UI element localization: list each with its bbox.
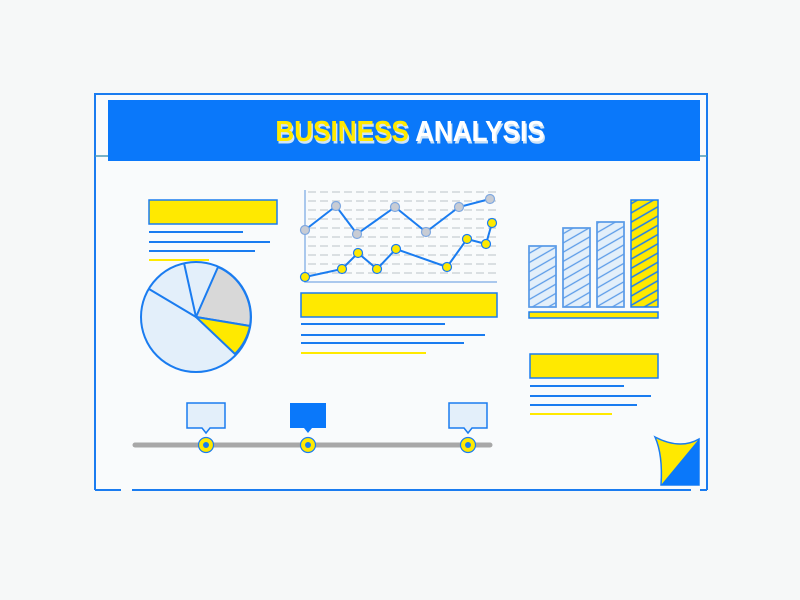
icon: page corner <box>655 437 699 485</box>
board frame <box>95 94 707 490</box>
line chart <box>300 190 497 282</box>
bar chart <box>529 200 658 318</box>
right text block <box>530 354 658 414</box>
left text block <box>149 200 277 260</box>
center text block <box>301 293 497 353</box>
title text: BUSINESS ANALYSIS <box>275 115 545 147</box>
timeline <box>135 403 490 452</box>
title: BUSINESS ANALYSIS <box>277 117 546 150</box>
pie chart <box>141 262 251 372</box>
callout 3 <box>449 403 487 433</box>
header banner <box>108 100 700 161</box>
callout 1 <box>187 403 225 433</box>
callout 2 <box>290 403 326 433</box>
